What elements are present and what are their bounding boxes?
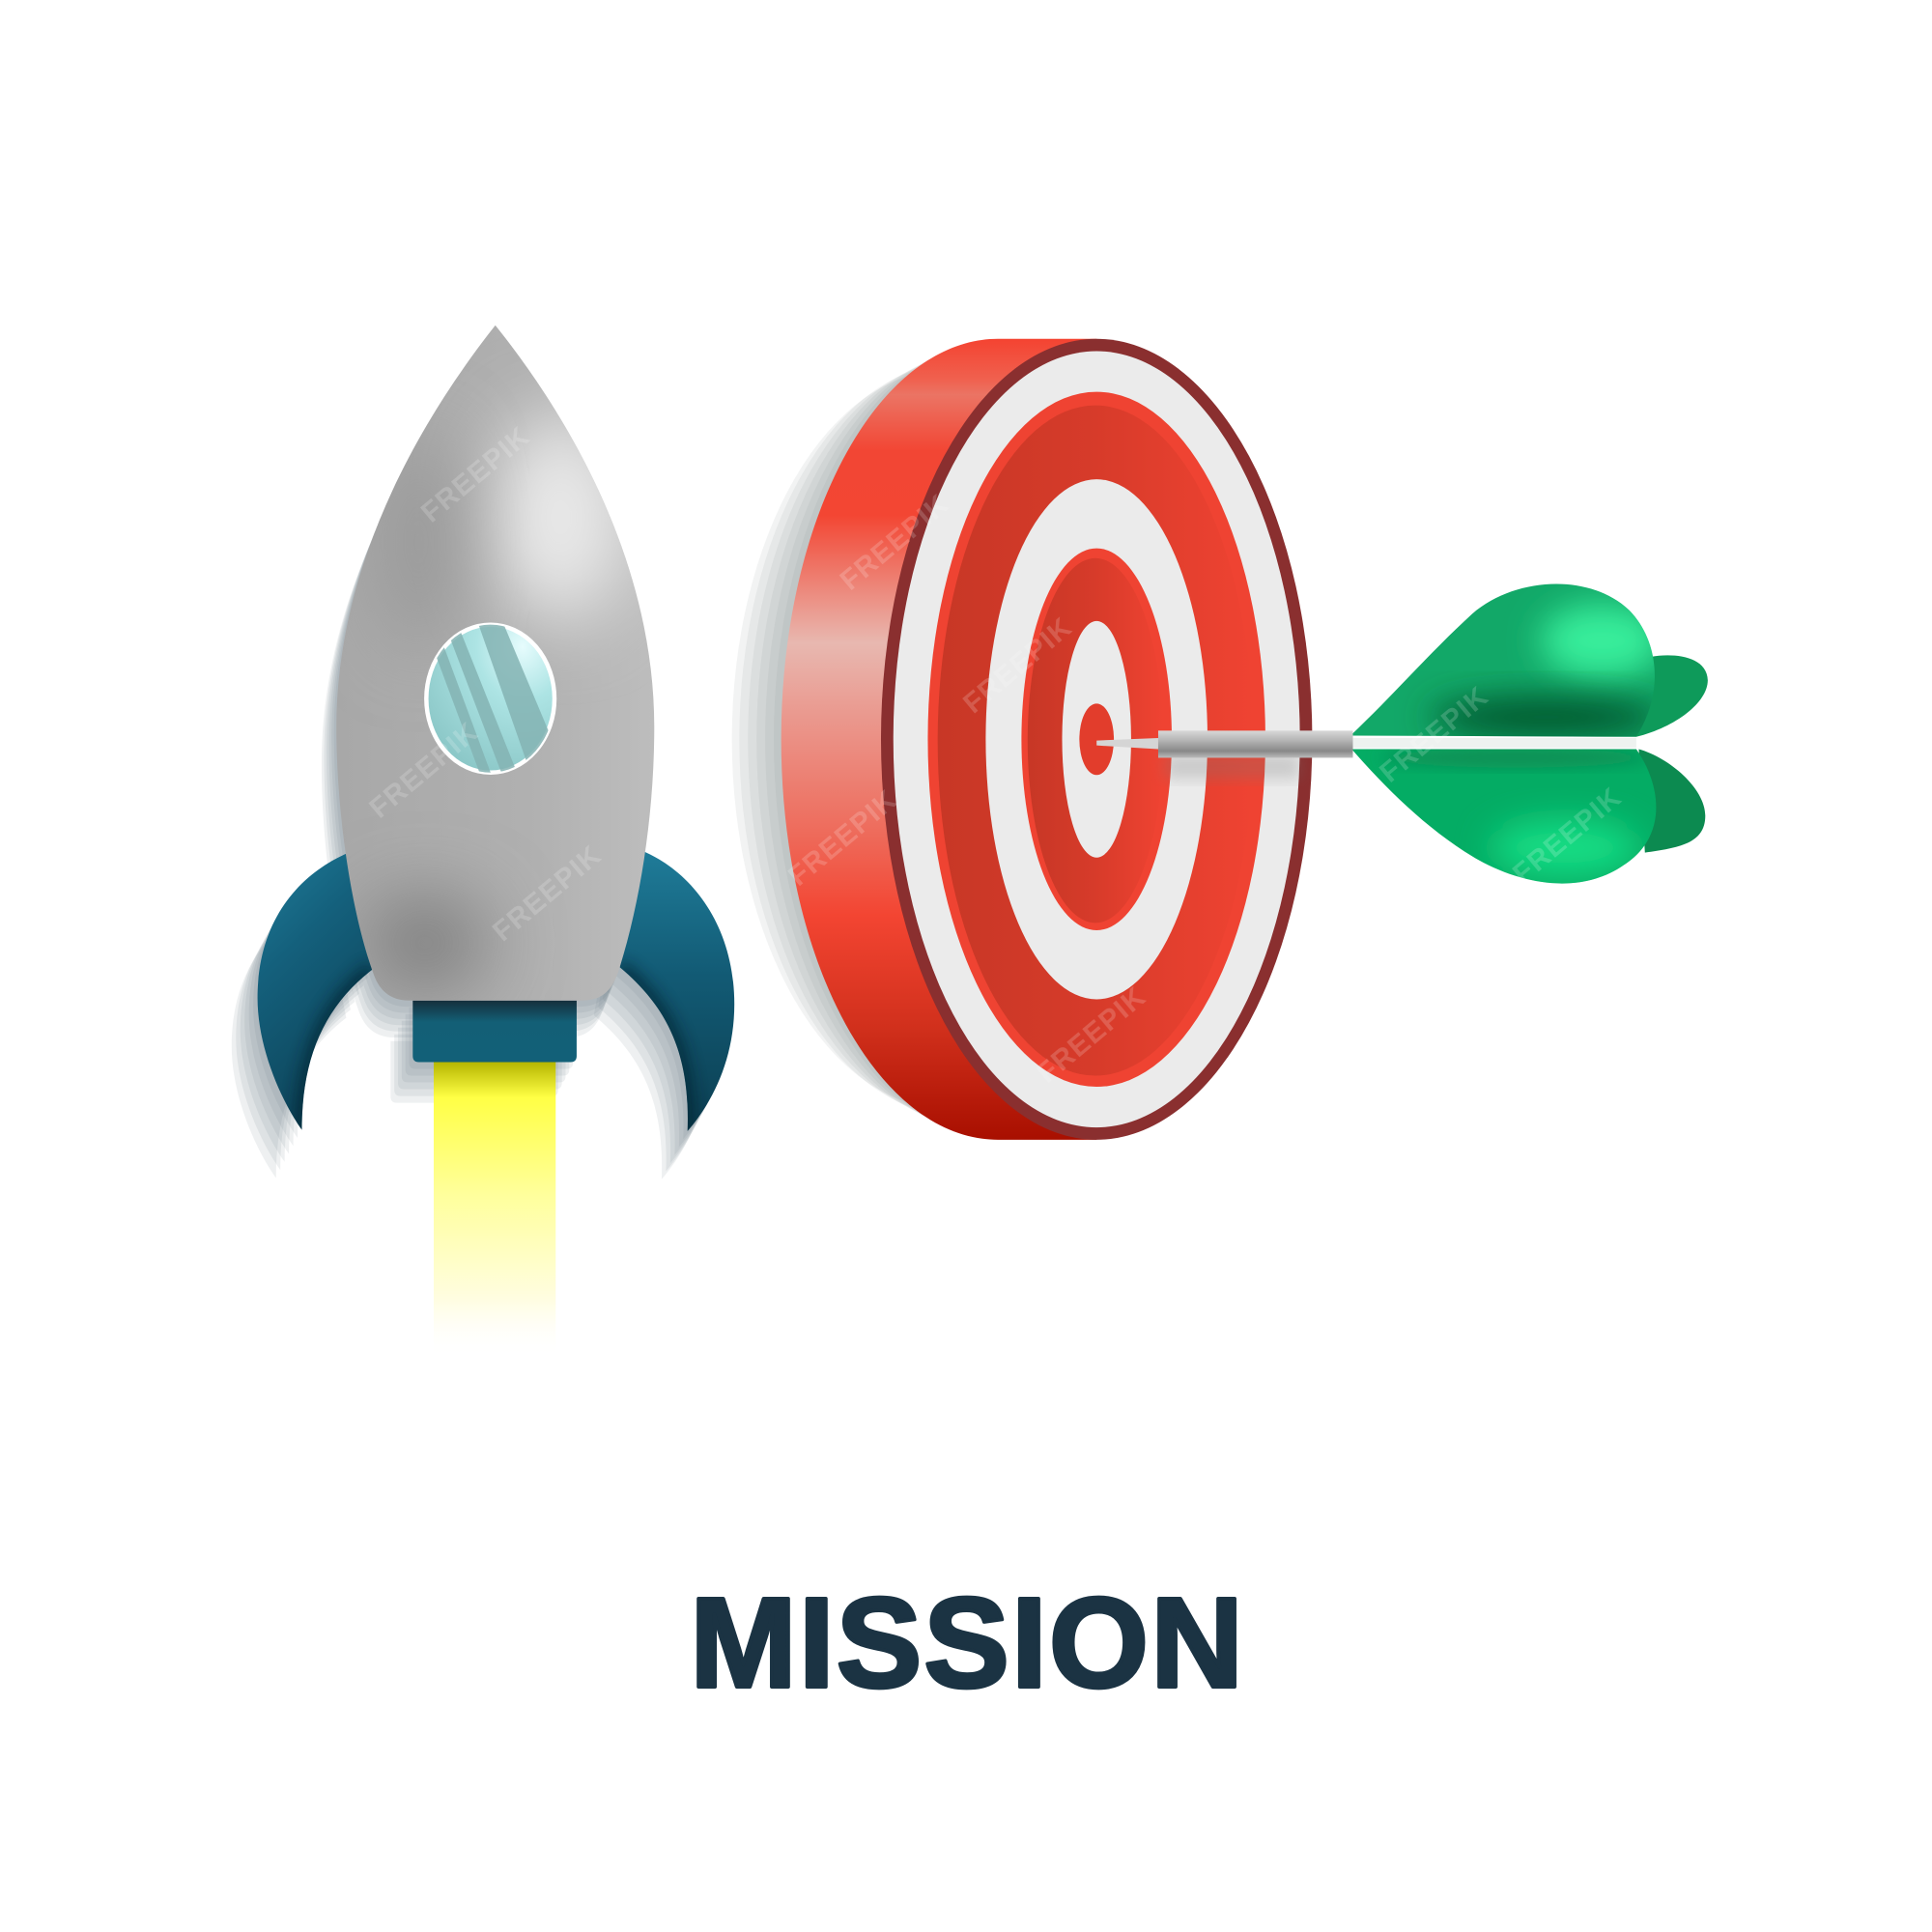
bullseye [1079, 703, 1114, 775]
watermarks: FREEPIK [415, 420, 536, 528]
rocket stepped shadow [232, 331, 730, 1179]
needle [1096, 738, 1158, 750]
middle white ring [985, 479, 1208, 999]
rear flights [1636, 655, 1708, 737]
target stepped shadow [732, 344, 1205, 1135]
exhaust flame [434, 1062, 555, 1358]
left fin [258, 853, 372, 1140]
target face [881, 339, 1312, 1140]
watermarks: FREEPIK [1374, 680, 1494, 789]
watermarks: FREEPIK [834, 488, 955, 597]
watermarks: FREEPIK [363, 716, 485, 825]
dart [1096, 584, 1708, 884]
rocket body [336, 326, 654, 1001]
nozzle [412, 1001, 577, 1062]
upper flight [1350, 584, 1663, 738]
inner white ring [1062, 621, 1131, 858]
target illustration [732, 339, 1312, 1140]
barrel [1158, 730, 1353, 757]
watermarks: FREEPIK [957, 611, 1078, 720]
title: MISSION [690, 1572, 1243, 1715]
outer red ring [927, 392, 1265, 1087]
watermarks: FREEPIK [782, 783, 903, 893]
lower flight [1351, 748, 1656, 884]
rocket illustration [232, 326, 734, 1358]
target side wall [781, 339, 1096, 1140]
porthole window [426, 616, 554, 779]
shaft [1353, 738, 1636, 748]
watermarks: FREEPIK [1031, 980, 1152, 1090]
watermarks: FREEPIK [487, 838, 608, 948]
watermarks [363, 420, 1628, 1090]
inner red ring [1021, 549, 1172, 930]
watermarks: FREEPIK [1507, 781, 1628, 890]
dart shadow on target [1164, 754, 1300, 779]
right fin [620, 850, 734, 1140]
